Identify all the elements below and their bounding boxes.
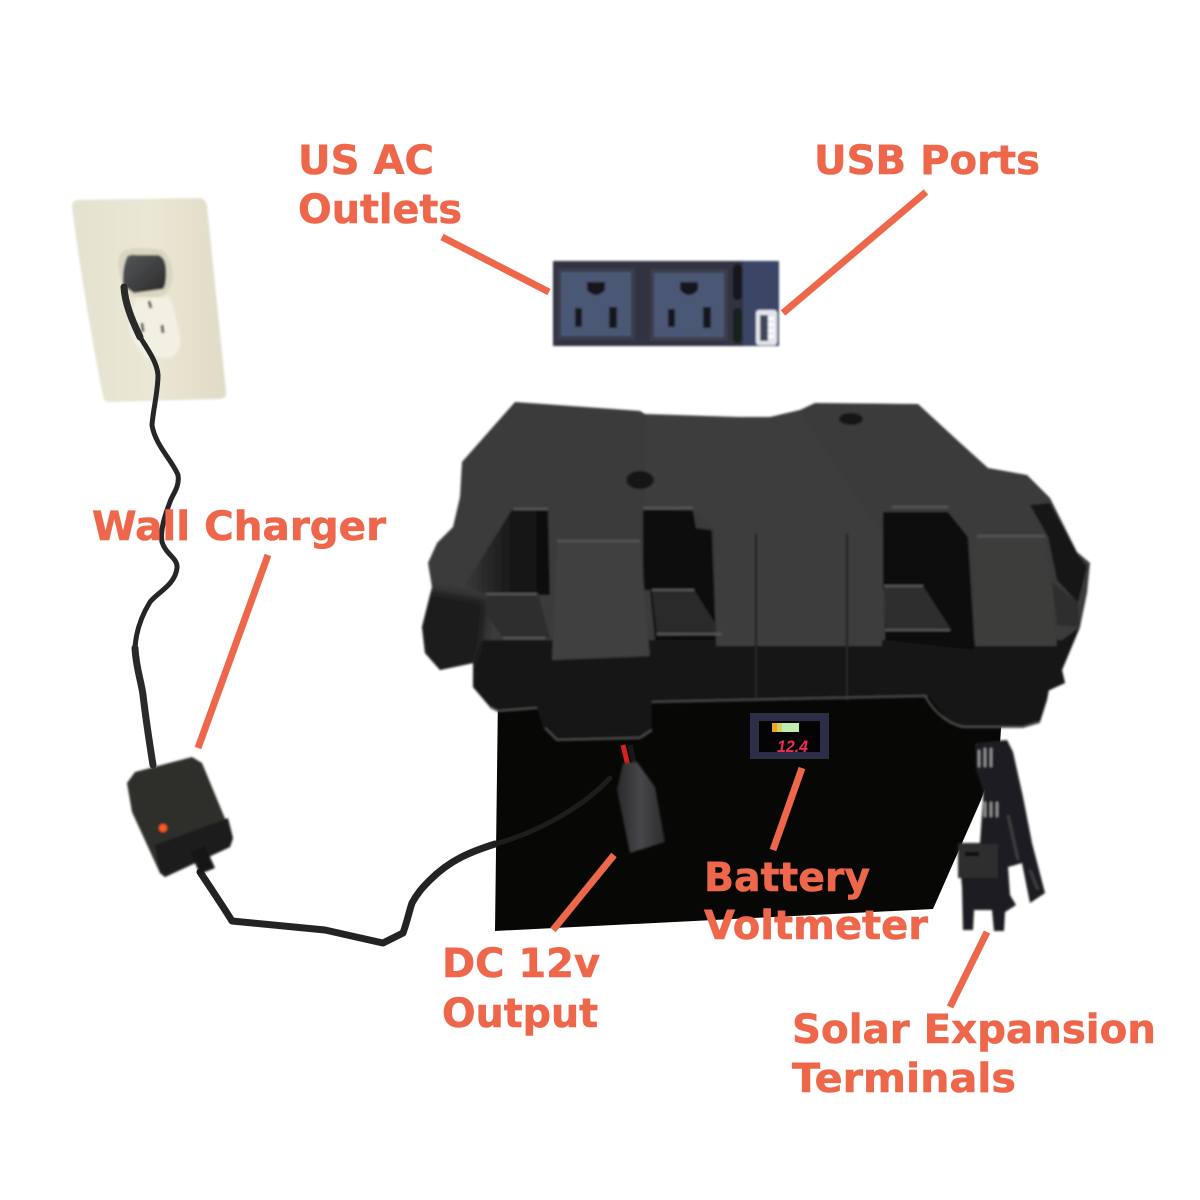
label: Wall Charger: Wall Charger bbox=[92, 504, 386, 550]
wall charger cable to DC side bbox=[200, 778, 610, 943]
power cord to wall charger bbox=[124, 287, 178, 765]
label: US AC Outlets: Outlets bbox=[298, 187, 462, 233]
label: DC 12v Output: DC 12v bbox=[442, 941, 600, 987]
lid center top bbox=[645, 412, 882, 533]
icon: outlet right bbox=[650, 269, 728, 341]
label: Solar Expansion Terminals: Terminals bbox=[792, 1056, 1016, 1102]
battery body bbox=[495, 695, 1003, 931]
arrow: wall charger bbox=[198, 555, 268, 748]
handle: left bbox=[552, 541, 650, 661]
right wing ledge bbox=[1052, 582, 1080, 627]
battery lid bbox=[410, 402, 1090, 740]
label: US AC Outlets: US AC bbox=[298, 138, 434, 184]
handle: right bbox=[975, 536, 1057, 648]
label: Solar Expansion Terminals: Solar Expansion bbox=[792, 1007, 1156, 1053]
label: USB Ports: USB Ports bbox=[814, 138, 1040, 184]
icon: wall plug bbox=[123, 255, 166, 333]
label: Battery Voltmeter: Voltmeter bbox=[704, 903, 928, 949]
voltage readout: 12.4 bbox=[777, 737, 809, 756]
icon: DC 12v output socket bbox=[617, 745, 665, 853]
label: Battery Voltmeter: Battery bbox=[704, 855, 870, 901]
icon: battery voltmeter bbox=[750, 713, 829, 759]
icon: battery box bbox=[410, 402, 1090, 931]
right sliver recess bbox=[1030, 503, 1087, 603]
second recess bbox=[643, 510, 716, 640]
arrow: solar terminals bbox=[950, 932, 987, 1007]
wing underside left bbox=[420, 588, 489, 671]
label: DC 12v Output bbox=[442, 941, 600, 1037]
icon: wall charger bbox=[127, 757, 233, 877]
lid edge highlights bbox=[652, 696, 926, 702]
second ledge bbox=[652, 590, 722, 636]
label: US AC Outlets bbox=[298, 138, 462, 233]
left recess bbox=[465, 508, 550, 595]
icon: wall outlet bbox=[72, 198, 226, 402]
icon: solar expansion terminals bbox=[958, 740, 1045, 931]
label: DC 12v Output: Output bbox=[442, 991, 598, 1037]
arrow: US AC outlets bbox=[442, 237, 549, 292]
center front panel bbox=[716, 534, 882, 646]
icon: outlet left bbox=[557, 268, 635, 340]
vent slots bbox=[626, 471, 654, 489]
lid skirt shadow bbox=[473, 627, 1080, 740]
left ledge bbox=[486, 593, 550, 638]
panel: AC outlets and USB bbox=[553, 261, 779, 346]
right recess bbox=[883, 512, 975, 650]
label: Solar Expansion Terminals bbox=[792, 1007, 1156, 1102]
icon: USB port bbox=[756, 310, 777, 345]
arrow: battery voltmeter bbox=[773, 768, 802, 850]
label: Battery Voltmeter bbox=[704, 855, 928, 949]
arrow: DC output bbox=[553, 855, 614, 930]
arrow: USB ports bbox=[783, 192, 926, 313]
right ledge bbox=[884, 586, 950, 631]
